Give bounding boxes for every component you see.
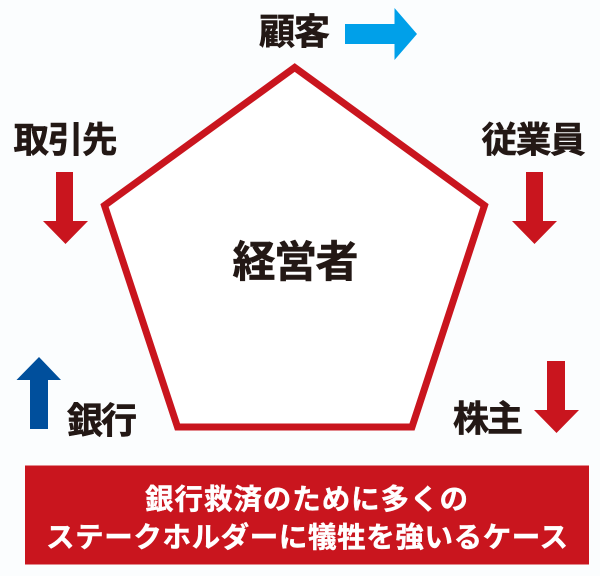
arrow: suppliers, down	[43, 172, 88, 244]
banner line 2: ステークホルダーに犠牲を強いるケース	[46, 521, 568, 554]
arrow: employees, down	[512, 172, 557, 244]
label: employees: 従業員	[482, 120, 586, 160]
banner background	[25, 466, 589, 564]
label: shareholders: 株主	[453, 398, 523, 439]
label: suppliers: 取引先	[14, 120, 118, 160]
arrow: banks, up	[16, 357, 61, 429]
arrow: customers, right	[345, 8, 417, 60]
arrow: shareholders, down	[534, 361, 579, 433]
label: banks: 銀行	[67, 400, 137, 441]
label: management: 経営者	[232, 239, 358, 287]
label: customers: 顧客	[259, 11, 330, 52]
pentagon: management	[104, 68, 484, 427]
banner line 1: 銀行救済のために多くの	[145, 484, 468, 516]
banner	[25, 466, 589, 564]
